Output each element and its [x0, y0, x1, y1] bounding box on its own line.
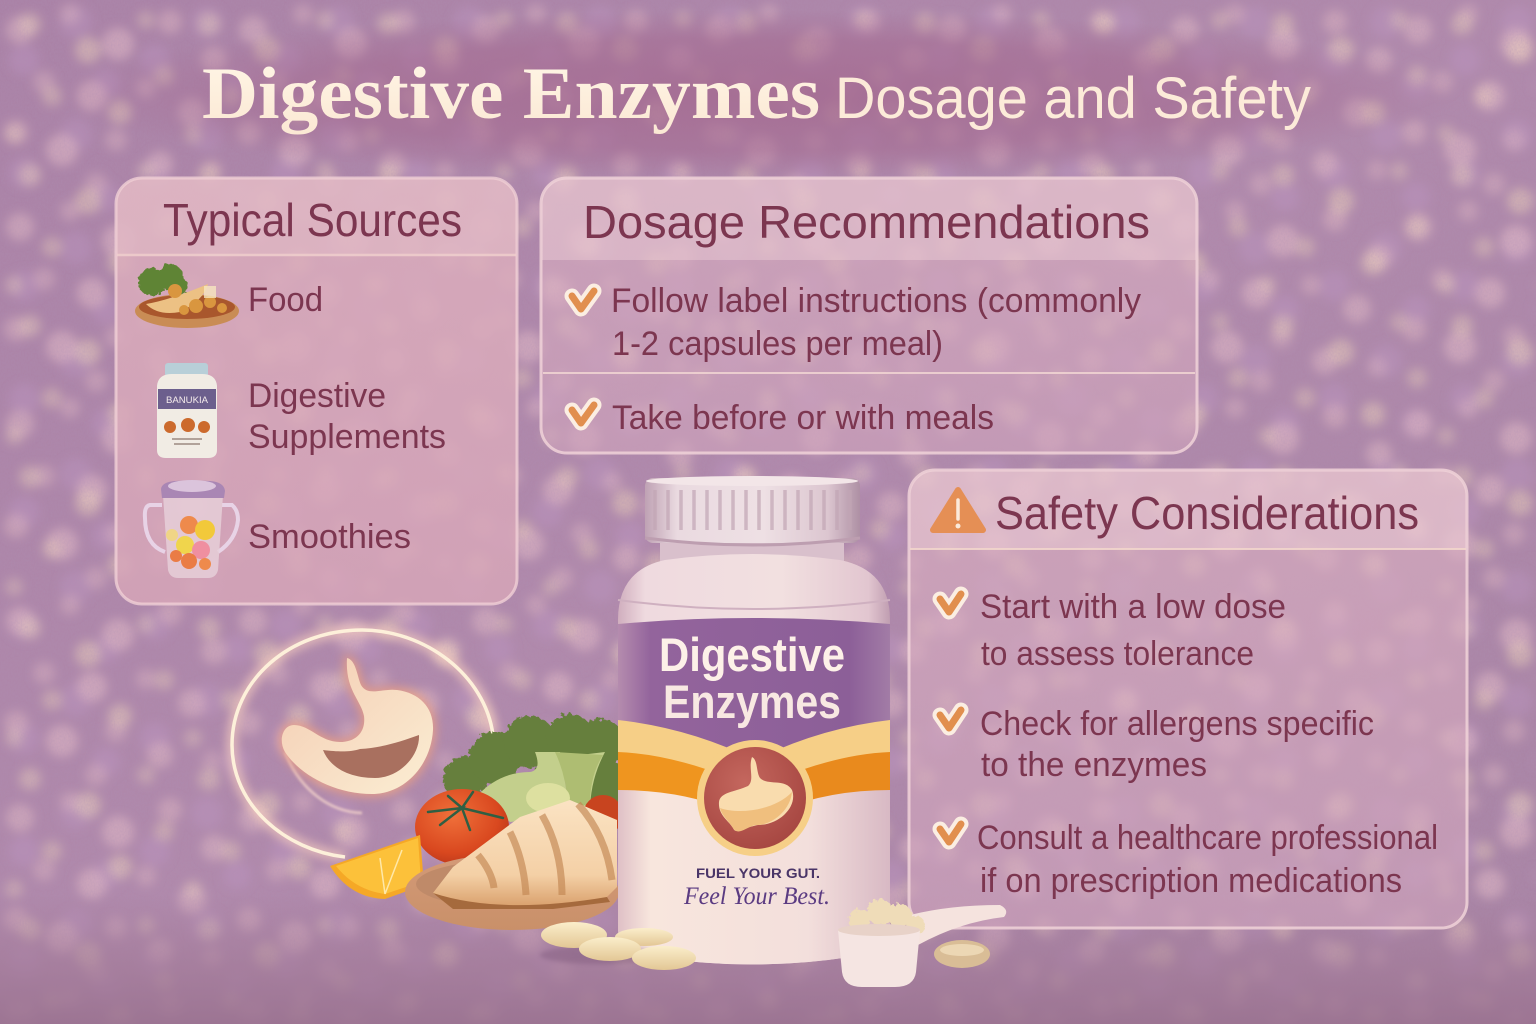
icon: check	[940, 710, 961, 728]
bottle cap	[645, 476, 860, 567]
text: consult a healthcare professional: if on prescription medications	[980, 862, 1402, 900]
heading: typical sources: Typical Sources	[163, 194, 462, 246]
ribbon	[618, 720, 890, 810]
bottle body	[618, 554, 890, 964]
text: start with a low dose: Start with a low dose	[980, 588, 1286, 626]
icon: supplement jar	[157, 363, 217, 458]
heading: dosage recommendations: Dosage Recommendations	[583, 196, 1150, 248]
illustration: supplement bottle	[618, 476, 890, 964]
stomach medal	[697, 740, 813, 856]
label: digestive supplements: Digestive	[248, 377, 386, 415]
illustration: capsules	[540, 922, 990, 970]
label: smoothies: Smoothies	[248, 518, 411, 556]
icon: check	[940, 594, 961, 612]
text: check for allergens: Check for allergens specific	[980, 705, 1374, 743]
lower label	[618, 780, 890, 964]
title: Digestive Enzymes	[202, 53, 820, 135]
tomato	[415, 789, 623, 865]
slogan script: Feel Your Best.	[683, 883, 830, 910]
text: check for allergens	[980, 705, 1374, 784]
text: follow label instructions	[611, 282, 1141, 363]
text: follow label instructions: 1-2 capsules per meal)	[612, 325, 943, 363]
label: digestive supplements	[248, 377, 446, 456]
text: consult a healthcare professional: Consult a healthcare professional	[977, 819, 1438, 857]
slogan: FUEL YOUR GUT.	[696, 866, 820, 881]
panel: dosage recommendations	[541, 178, 1197, 453]
panel: typical sources	[116, 178, 517, 604]
panel: safety considerations	[909, 470, 1467, 928]
broccoli	[443, 714, 629, 822]
icon: food plate	[135, 264, 239, 328]
illustration: measuring scoop	[838, 899, 1006, 987]
bottle label text: Digestive	[659, 628, 845, 681]
text: start with a low dose: to assess tolerance	[981, 635, 1254, 673]
plate	[405, 854, 619, 930]
bottle label text: Enzymes	[663, 675, 841, 728]
title	[202, 53, 1311, 135]
text: check for allergens: to the enzymes	[981, 746, 1207, 784]
illustration: food group	[330, 714, 629, 930]
icon: check	[940, 824, 961, 842]
icon: warning triangle	[933, 490, 983, 530]
icon: check	[572, 405, 594, 423]
heading: safety considerations: Safety Considerations	[995, 487, 1419, 539]
icon: glowing stomach ring	[232, 630, 493, 857]
label: digestive supplements: Supplements	[248, 418, 446, 456]
grilled chicken	[433, 800, 617, 909]
title: Dosage and Safety	[835, 66, 1311, 131]
purple label	[618, 618, 890, 760]
icon: smoothie cup	[145, 480, 238, 578]
text: consult a healthcare professional	[977, 819, 1438, 900]
text: start with a low dose	[980, 588, 1286, 673]
icon: check	[572, 291, 594, 309]
text: follow label instructions: Follow label instructions (commonly	[611, 282, 1141, 320]
orange wedge	[330, 835, 424, 899]
label: food: Food	[248, 281, 323, 319]
icon: supplement jar: BANUKIA	[166, 395, 209, 406]
text: take before or with meals: Take before or with meals	[612, 399, 994, 437]
